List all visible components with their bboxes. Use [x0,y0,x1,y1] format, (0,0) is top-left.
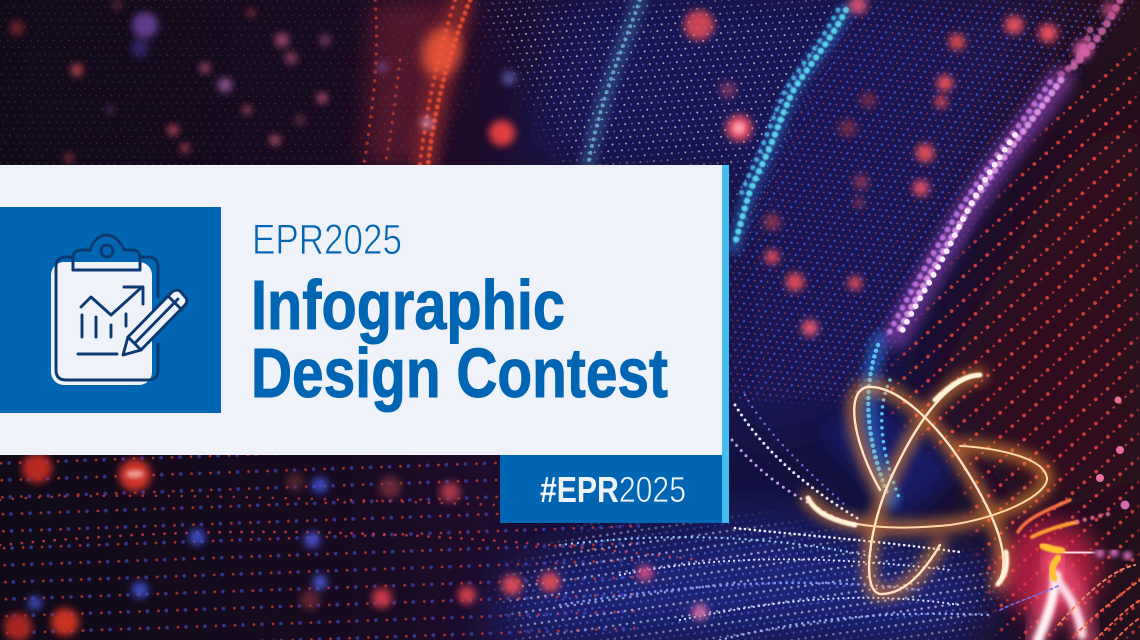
panel: title card [0,165,729,523]
red stream [364,0,470,165]
heading: Infographic Design Contest: Infographic [251,266,565,344]
heading: Infographic Design Contest [251,266,668,412]
panel: hashtag [500,455,722,523]
glow: bright lower-right streams [1000,396,1140,640]
text: EPR2025: EPR2025 [252,216,402,264]
icon: atom orbits [808,375,1047,594]
purple stream [732,0,1120,525]
horizontal dotted lines [0,496,990,640]
icon: clipboard with chart and pencil [51,235,187,385]
heading: Infographic Design Contest: Design Contest [251,334,668,412]
text: #EPR2025: #EPR2025 [540,469,686,510]
cyan stream [588,0,900,500]
accent bar [722,165,729,523]
panel: icon box [0,207,221,413]
